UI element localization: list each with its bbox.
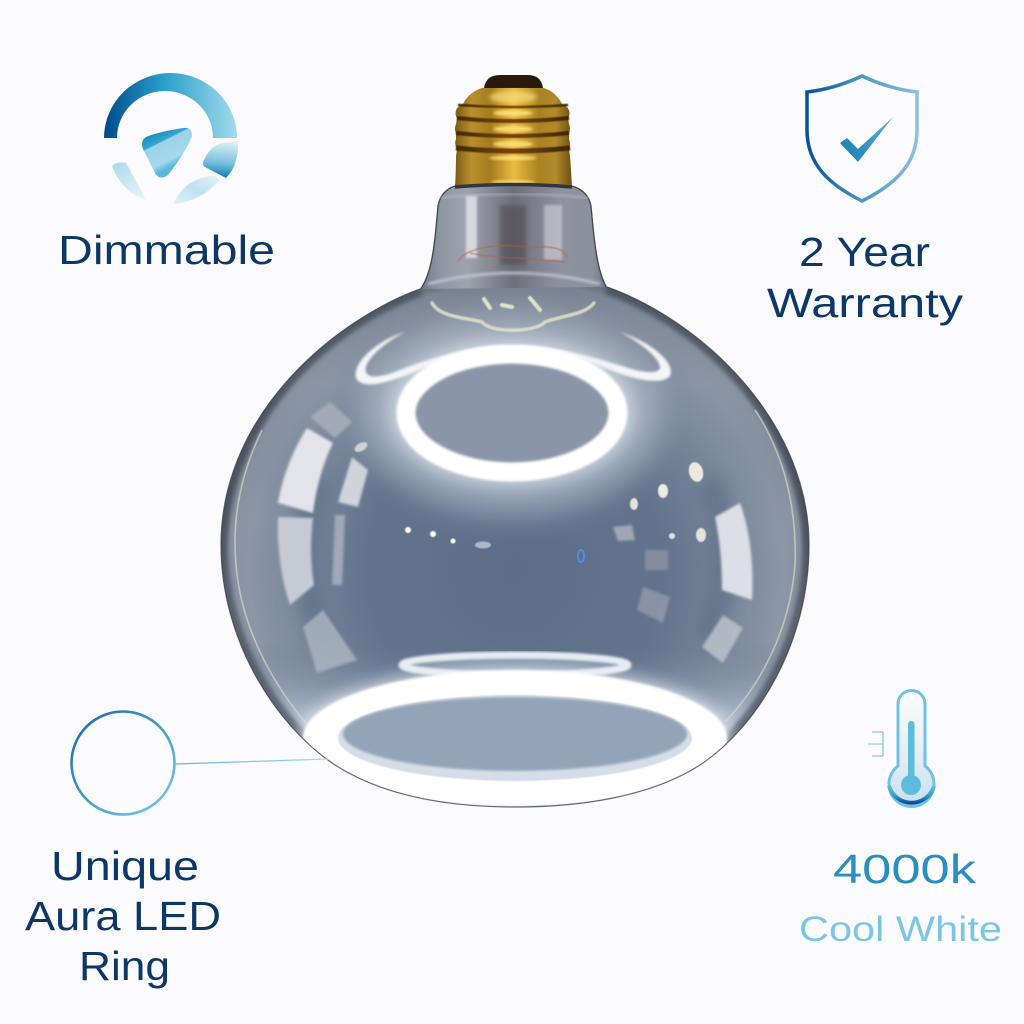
heading: Unique Aura LED Ring: Unique	[51, 843, 199, 889]
dark rim shade	[221, 287, 809, 765]
filament reflection	[432, 298, 594, 330]
icon: dimmable dial	[104, 73, 238, 204]
label: 4000k: 4000k	[833, 846, 977, 892]
callout: LED ring circle and leader	[72, 712, 328, 814]
heading: 2 Year Warranty: Warranty	[767, 280, 964, 326]
rim highlight	[235, 430, 305, 722]
bulb: glass globe	[215, 280, 815, 810]
bulb: outline	[221, 287, 809, 807]
LED ring: lower reflection	[402, 655, 628, 675]
LED ring: upper	[405, 354, 619, 472]
heading: 2 Year Warranty: 2 Year	[799, 229, 930, 275]
heading: Unique Aura LED Ring: Ring	[79, 943, 170, 989]
window reflections, left	[278, 402, 368, 673]
heading: 2 Year Warranty	[767, 229, 964, 326]
icon: thermometer	[868, 690, 934, 806]
heading: Dimmable: Dimmable	[58, 227, 275, 273]
icon: warranty shield	[807, 76, 917, 201]
bulb: brass screw base	[455, 75, 572, 187]
soft glow around upper ring	[362, 315, 662, 515]
LED ring: lower	[299, 666, 731, 810]
inner concentric glass bands	[306, 480, 724, 640]
heading: Unique Aura LED Ring: Aura LED	[25, 893, 221, 939]
reflected upper arcs	[356, 332, 671, 384]
window reflections, right	[613, 503, 752, 663]
heading: Unique Aura LED Ring	[25, 843, 221, 989]
label: Cool White: Cool White	[799, 910, 1002, 949]
bulb: glass neck	[420, 184, 607, 290]
small light points	[353, 440, 706, 548]
